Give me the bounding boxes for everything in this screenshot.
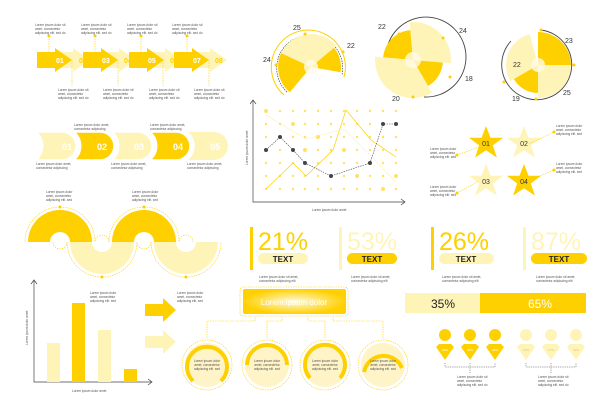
wave: amet, consectetur bbox=[90, 295, 116, 299]
people icons: adipiscing elit. sed do bbox=[538, 383, 569, 387]
arrow timeline: 03 bbox=[102, 58, 110, 65]
pie chart 2: 22 bbox=[378, 24, 386, 31]
tab steps bbox=[36, 123, 228, 170]
tab steps: 05 bbox=[210, 142, 220, 152]
bar chart bbox=[25, 280, 152, 393]
org chart: adipiscing elit. sed bbox=[370, 367, 396, 371]
people icons: 20% bbox=[442, 348, 448, 352]
stars: 01 bbox=[482, 141, 490, 148]
stars: amet, consectetur bbox=[430, 151, 456, 155]
pie chart 3: 23 bbox=[565, 38, 573, 45]
people icons: 22% bbox=[492, 348, 498, 352]
pie chart 3: 25 bbox=[563, 90, 571, 97]
people icons: amet, consectetur bbox=[457, 379, 483, 383]
wave: adipiscing elit. sed bbox=[177, 299, 203, 303]
arrow timeline: adipiscing elit. sed do bbox=[81, 31, 112, 35]
percent stats: 21% bbox=[258, 228, 308, 256]
stars: adipiscing elit. sed bbox=[430, 193, 456, 197]
arrow timeline: amet, consectetur bbox=[127, 27, 153, 31]
line chart: Lorem ipsum dolor amet bbox=[312, 208, 346, 212]
arrow timeline: 02 bbox=[79, 58, 87, 65]
arrow timeline: Lorem ipsum dolor sit bbox=[149, 88, 180, 92]
wave bbox=[25, 190, 222, 303]
arrow timeline: adipiscing elit. sed do bbox=[58, 96, 89, 100]
arrow timeline: amet, consectetur bbox=[81, 27, 107, 31]
org chart: adipiscing elit. sed bbox=[194, 367, 220, 371]
pie chart 3 bbox=[502, 28, 576, 103]
wave: adipiscing elit. sed bbox=[46, 198, 72, 202]
stars: 03 bbox=[482, 179, 490, 186]
pie chart 3: 22 bbox=[513, 62, 521, 69]
percent stats: Lorem ipsum dolor sit amet, bbox=[536, 275, 575, 279]
percent stats: TEXT bbox=[362, 255, 382, 264]
percent stats: 26% bbox=[439, 228, 489, 256]
arrow timeline: amet, consectetur bbox=[149, 92, 175, 96]
percent stats: consectetur adipiscing elit bbox=[536, 279, 573, 283]
35/65 bar bbox=[405, 293, 586, 313]
tab steps: consectetur adipiscing bbox=[74, 127, 106, 131]
wave: Lorem ipsum dolor bbox=[90, 291, 117, 295]
stars: amet, consectetur bbox=[430, 189, 456, 193]
percent stats: 87% bbox=[531, 228, 581, 256]
people icons: 12% bbox=[523, 348, 529, 352]
stars: amet, consectetur bbox=[556, 128, 582, 132]
pie chart 2: 18 bbox=[465, 76, 473, 83]
tab steps: Lorem ipsum dolor amet, bbox=[74, 123, 109, 127]
org chart: adipiscing elit. sed bbox=[312, 367, 338, 371]
people icons: Lorem ipsum dolor sit bbox=[538, 375, 569, 379]
pie chart 2: 20 bbox=[392, 96, 400, 103]
wave: amet, consectetur bbox=[132, 194, 158, 198]
tab steps: Lorem ipsum dolor amet, bbox=[36, 162, 71, 166]
stars: Lorem ipsum dolor bbox=[556, 162, 583, 166]
arrow timeline: Lorem ipsum dolor sit bbox=[127, 23, 158, 27]
people icons: 11% bbox=[573, 348, 579, 352]
org chart: amet, consectetur bbox=[194, 363, 221, 367]
tab steps: consectetur adipiscing bbox=[150, 127, 182, 131]
wave: adipiscing elit. sed bbox=[132, 198, 158, 202]
pie chart 1 bbox=[263, 25, 355, 95]
tab steps: Lorem ipsum dolor amet, bbox=[150, 123, 185, 127]
org chart: Lorem ipsum dolor bbox=[194, 359, 221, 363]
percent stats: TEXT bbox=[456, 255, 476, 264]
stars: Lorem ipsum dolor bbox=[556, 124, 583, 128]
arrow timeline: Lorem ipsum dolor sit bbox=[103, 88, 134, 92]
pie chart 1: 24 bbox=[263, 57, 271, 64]
stars: adipiscing elit. sed bbox=[556, 170, 582, 174]
percent stats: Lorem ipsum dolor sit amet, bbox=[351, 275, 390, 279]
tab steps: 03 bbox=[134, 142, 144, 152]
org chart: amet, consectetur bbox=[312, 363, 339, 367]
arrow timeline: 08 bbox=[215, 58, 223, 65]
35/65 bar: 65% bbox=[528, 297, 552, 311]
stars: 02 bbox=[520, 141, 528, 148]
arrow timeline: Lorem ipsum dolor sit bbox=[35, 23, 66, 27]
arrow timeline: 05 bbox=[148, 58, 156, 65]
arrow timeline: adipiscing elit. sed do bbox=[172, 31, 203, 35]
people icons bbox=[436, 329, 585, 387]
arrow timeline bbox=[35, 23, 227, 100]
arrow timeline: adipiscing elit. sed do bbox=[194, 96, 225, 100]
arrow timeline: amet, consectetur bbox=[194, 92, 220, 96]
stars bbox=[430, 124, 583, 197]
arrow timeline: adipiscing elit. sed do bbox=[103, 96, 134, 100]
org chart: Lorem ipsum dolor bbox=[254, 359, 281, 363]
big arrows bbox=[145, 298, 176, 354]
percent stats: Lorem ipsum dolor sit amet, bbox=[442, 275, 481, 279]
stars: amet, consectetur bbox=[556, 166, 582, 170]
wave: Lorem ipsum dolor bbox=[46, 190, 73, 194]
tab steps: consectetur adipiscing bbox=[187, 166, 219, 170]
percent stats: Lorem ipsum dolor sit amet, bbox=[259, 275, 298, 279]
arrow timeline: amet, consectetur bbox=[172, 27, 198, 31]
bar chart: Lorem ipsum dolor amet bbox=[25, 311, 29, 345]
org chart: adipiscing elit. sed bbox=[254, 367, 280, 371]
people icons: amet, consectetur bbox=[538, 379, 564, 383]
people icons: adipiscing elit. sed do bbox=[457, 383, 488, 387]
people icons: 17% bbox=[548, 348, 554, 352]
percent stats: consectetur adipiscing elit bbox=[351, 279, 388, 283]
percent stats: consectetur adipiscing elit bbox=[259, 279, 296, 283]
arrow timeline: amet, consectetur bbox=[58, 92, 84, 96]
people icons: 40% bbox=[467, 348, 473, 352]
org chart: amet, consectetur bbox=[370, 363, 397, 367]
arrow timeline: amet, consectetur bbox=[103, 92, 129, 96]
arrow timeline: 07 bbox=[193, 58, 201, 65]
arrow timeline: adipiscing elit. sed do bbox=[127, 31, 158, 35]
stars: 04 bbox=[520, 179, 528, 186]
pie chart 1: 25 bbox=[293, 25, 301, 32]
35/65 bar: 35% bbox=[431, 297, 455, 311]
tab steps: 01 bbox=[62, 142, 72, 152]
wave: amet, consectetur bbox=[177, 295, 203, 299]
arrow timeline: 01 bbox=[56, 58, 64, 65]
percent stats: consectetur adipiscing elit bbox=[442, 279, 479, 283]
arrow timeline: Lorem ipsum dolor sit bbox=[194, 88, 225, 92]
arrow timeline: Lorem ipsum dolor sit bbox=[81, 23, 112, 27]
pie chart 2: 24 bbox=[459, 28, 467, 35]
people icons: Lorem ipsum dolor sit bbox=[457, 375, 488, 379]
tab steps: 04 bbox=[173, 142, 183, 152]
org chart: Lorem ipsum dolor bbox=[261, 298, 327, 307]
line chart bbox=[245, 100, 405, 212]
pie chart 2 bbox=[375, 17, 473, 103]
tab steps: 02 bbox=[97, 142, 107, 152]
wave: amet, consectetur bbox=[46, 194, 72, 198]
org chart: Lorem ipsum dolor bbox=[370, 359, 397, 363]
tab steps: consectetur adipiscing bbox=[36, 166, 68, 170]
arrow timeline: adipiscing elit. sed do bbox=[35, 31, 66, 35]
wave: Lorem ipsum dolor bbox=[132, 190, 159, 194]
arrow timeline: Lorem ipsum dolor sit bbox=[172, 23, 203, 27]
line chart: Lorem ipsum dolor amet bbox=[245, 131, 249, 165]
stars: Lorem ipsum dolor bbox=[430, 185, 457, 189]
wave: adipiscing elit. sed bbox=[90, 299, 116, 303]
tab steps: Lorem ipsum dolor amet, bbox=[187, 162, 222, 166]
arrow timeline: Lorem ipsum dolor sit bbox=[58, 88, 89, 92]
pie chart 1: 22 bbox=[347, 43, 355, 50]
percent stats bbox=[250, 227, 587, 283]
org chart bbox=[182, 287, 408, 390]
tab steps: Lorem ipsum dolor amet, bbox=[111, 162, 146, 166]
arrow timeline: 06 bbox=[170, 58, 178, 65]
stars: adipiscing elit. sed bbox=[556, 132, 582, 136]
arrow timeline: 04 bbox=[124, 58, 132, 65]
org chart: amet, consectetur bbox=[254, 363, 281, 367]
wave: Lorem ipsum dolor bbox=[177, 291, 204, 295]
percent stats: TEXT bbox=[549, 255, 569, 264]
pie chart 3: 19 bbox=[512, 96, 520, 103]
arrow timeline: amet, consectetur bbox=[35, 27, 61, 31]
tab steps: consectetur adipiscing bbox=[111, 166, 143, 170]
bar chart: Lorem ipsum dolor amet bbox=[72, 389, 106, 393]
percent stats: 53% bbox=[347, 228, 397, 256]
stars: Lorem ipsum dolor bbox=[430, 147, 457, 151]
stars: adipiscing elit. sed bbox=[430, 155, 456, 159]
org chart: Lorem ipsum dolor bbox=[312, 359, 339, 363]
arrow timeline: adipiscing elit. sed do bbox=[149, 96, 180, 100]
percent stats: TEXT bbox=[273, 255, 293, 264]
